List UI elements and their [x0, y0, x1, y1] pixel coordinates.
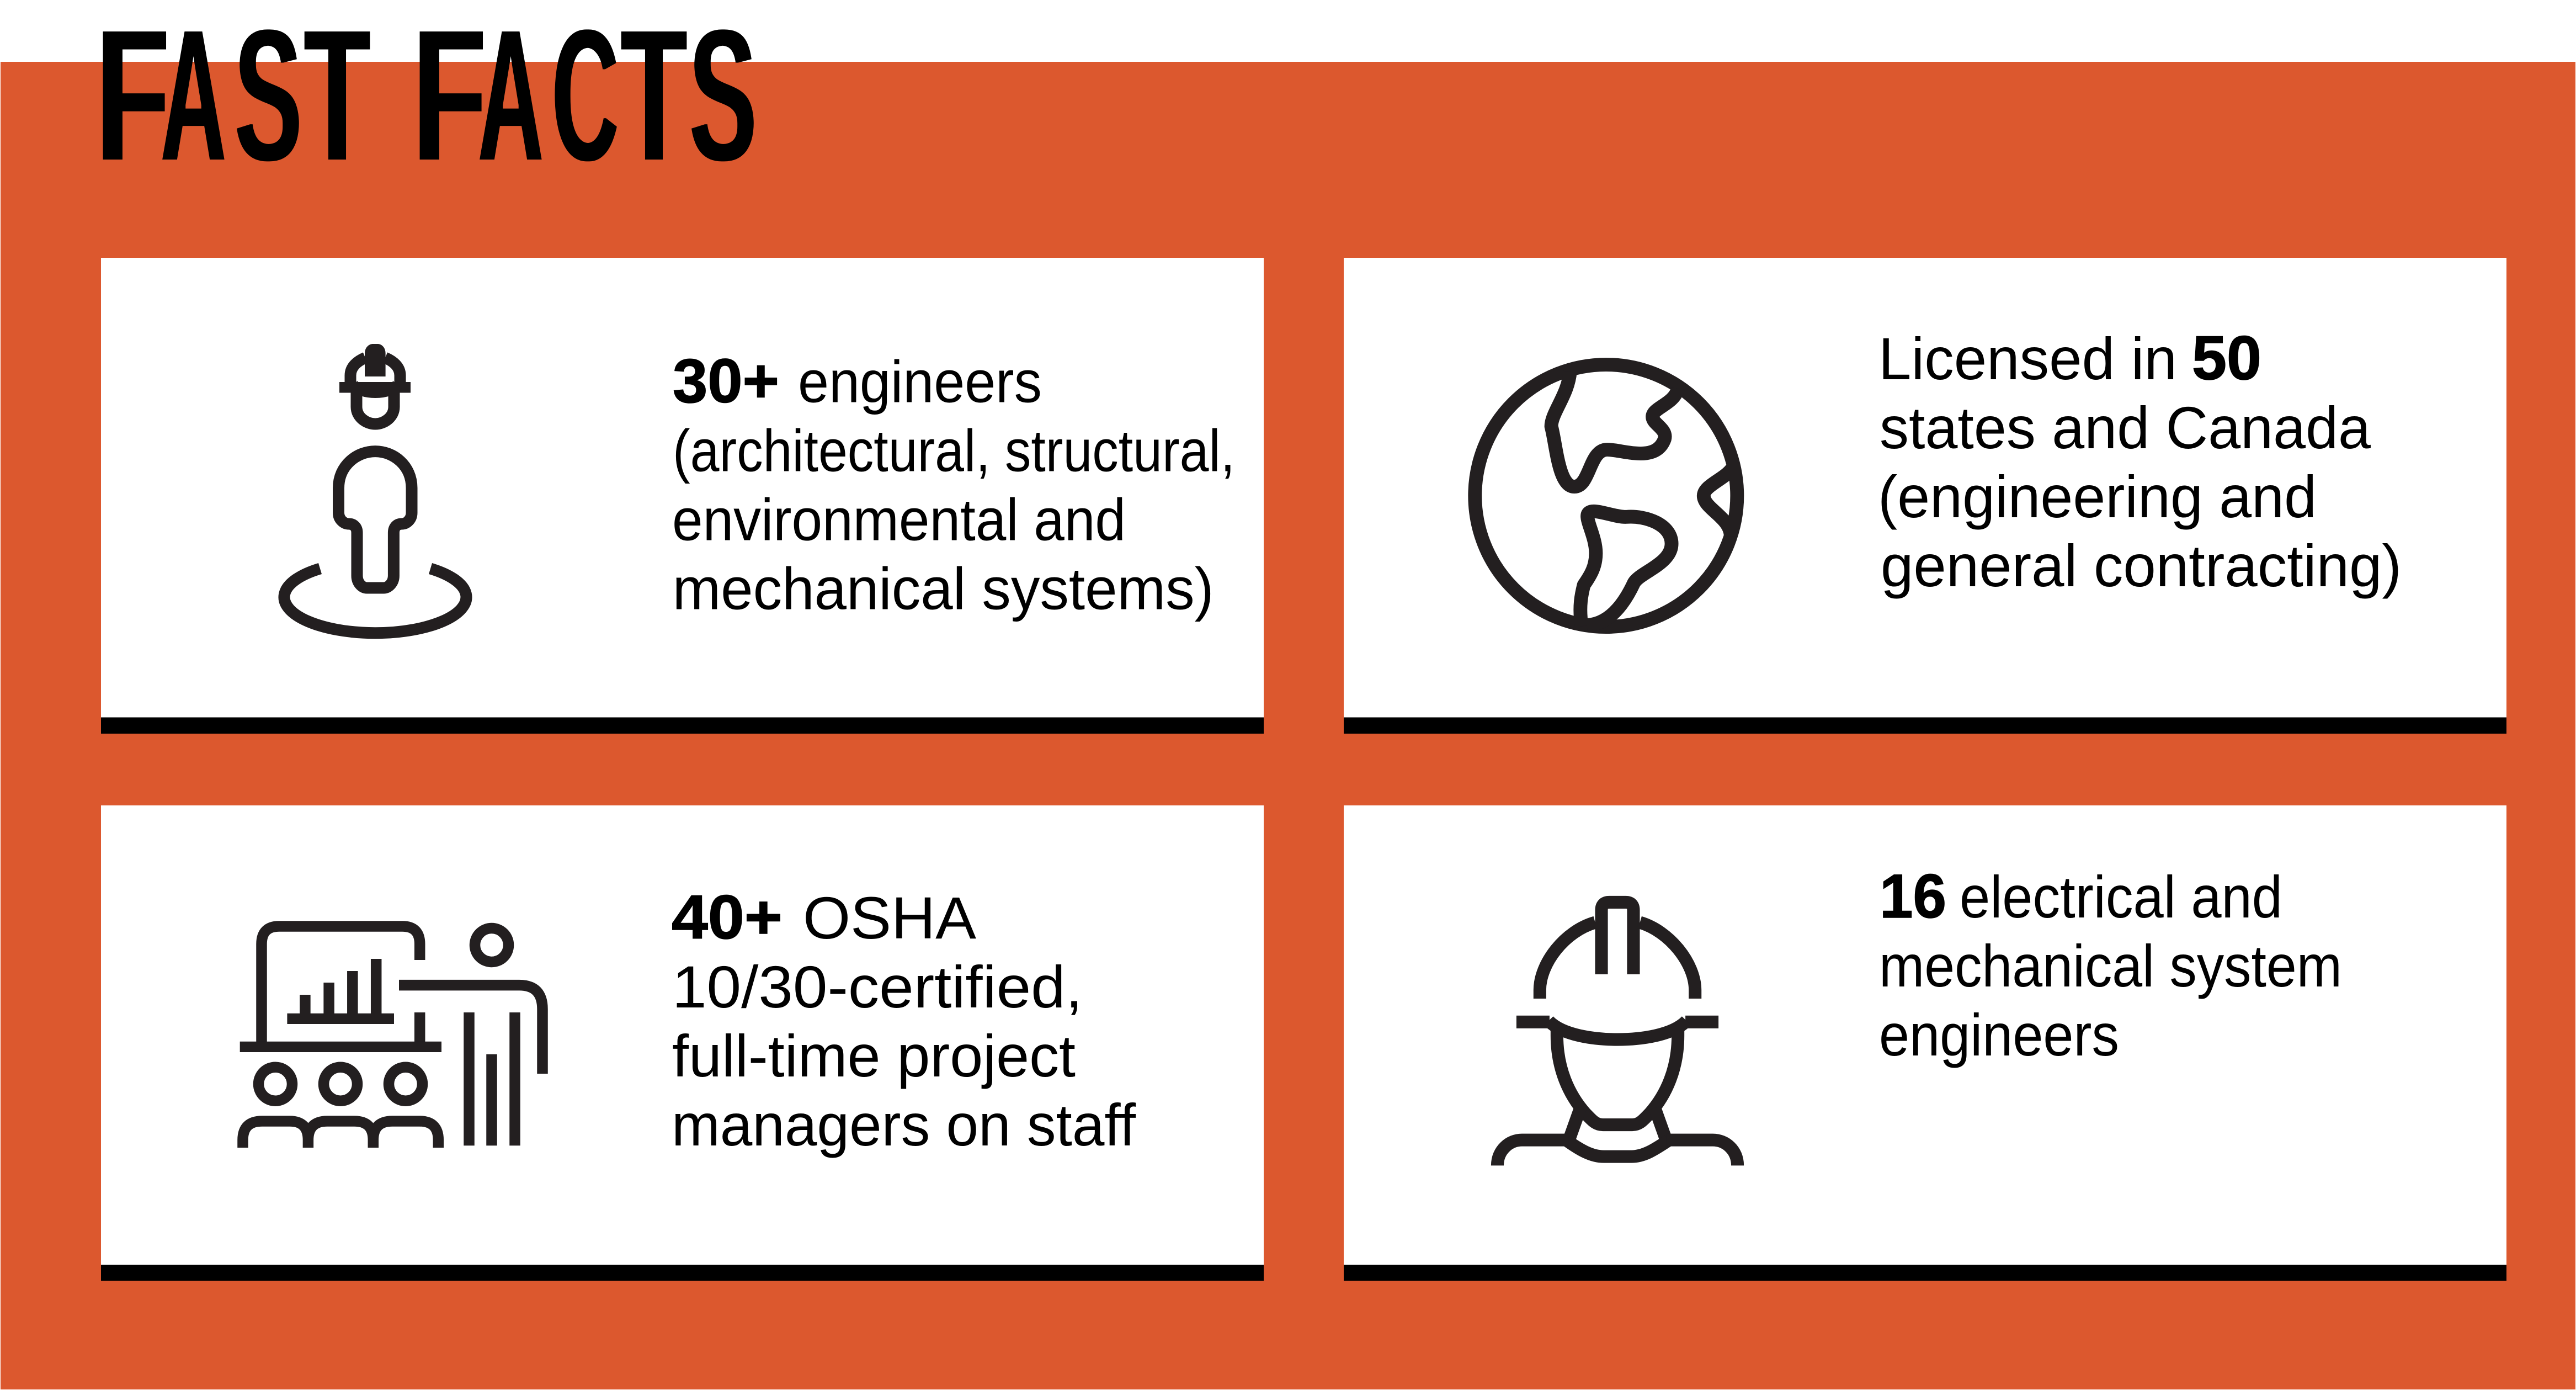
text: 30+ engineers: 30+ [673, 347, 779, 416]
text: 40+ OSHA certified: managers on staff [672, 1091, 1136, 1158]
text: 30+ engineers: mechanical systems) [673, 555, 1214, 622]
panel: licensing [1344, 258, 2506, 734]
panel: project managers [101, 805, 1264, 1281]
icon: worker in hard hat [1497, 902, 1738, 1165]
text: 30+ engineers: engineers [798, 348, 1042, 415]
card bottom bar [101, 1265, 1264, 1281]
card background [101, 258, 1264, 718]
text: licensed in 50 states: states and Canada [1880, 394, 2371, 461]
text: 40+ OSHA certified: 40+ [672, 883, 783, 952]
text: 16 electrical and mechanical system engineers: 16 [1880, 862, 1946, 931]
text: 16 electrical and mechanical system engineers [1879, 862, 2342, 1068]
text: 16 electrical and mechanical system engineers: engineers [1879, 1001, 2119, 1068]
card background [1344, 805, 2506, 1265]
text: 16 electrical and mechanical system engineers: electrical and [1960, 863, 2282, 930]
text: 16 electrical and mechanical system engineers: mechanical system [1879, 932, 2342, 999]
text: 40+ OSHA certified: 10/30-certified, [672, 953, 1083, 1020]
card bottom bar [1344, 718, 2506, 734]
text: licensed in 50 states: general contracting) [1881, 532, 2402, 599]
icon: globe [1475, 365, 1737, 627]
text: 40+ OSHA certified [672, 883, 1136, 1158]
card background [1344, 258, 2506, 718]
panel: engineers [101, 258, 1264, 734]
text: 30+ engineers [672, 347, 1235, 622]
text: 30+ engineers: (architectural, structural, [673, 417, 1235, 484]
text: 30+ engineers: environmental and [672, 486, 1126, 553]
text: 40+ OSHA certified: OSHA [803, 884, 976, 951]
card bottom bar [101, 718, 1264, 734]
card background [101, 805, 1264, 1265]
text: licensed in 50 states: 50 [2192, 323, 2261, 392]
text: licensed in 50 states: (engineering and [1878, 463, 2317, 530]
text: licensed in 50 states: Licensed in [1878, 325, 2177, 392]
panel: system engineers [1344, 805, 2506, 1281]
icon: presenter with audience [240, 926, 542, 1148]
icon: engineer standing on location ring [284, 344, 466, 633]
text: licensed in 50 states [1878, 323, 2402, 599]
card bottom bar [1344, 1265, 2506, 1281]
text: 40+ OSHA certified: full-time project [672, 1022, 1076, 1089]
title [96, 0, 757, 202]
